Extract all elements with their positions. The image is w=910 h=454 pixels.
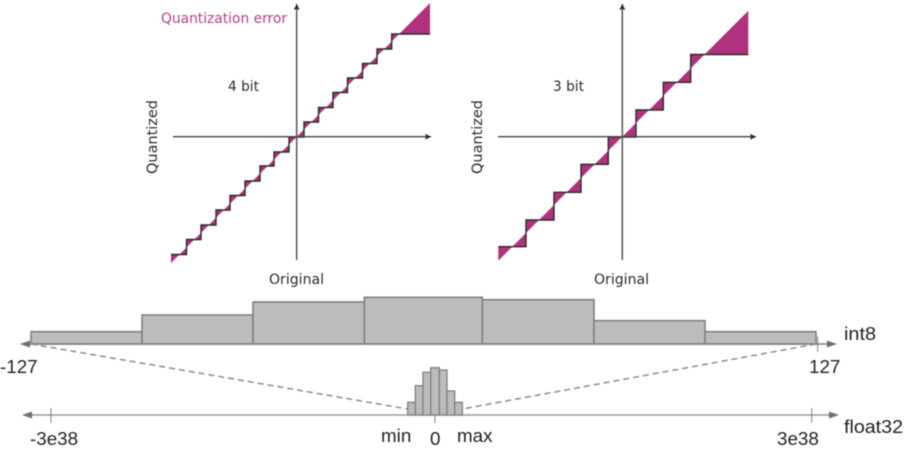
label: min: min [381,425,411,446]
label: max: max [457,425,493,446]
int8 histogram and axis [0,297,876,377]
axis: horizontal (3 bit) [498,136,756,138]
quantization error area (4 bit) [171,3,430,263]
label: quantized (3 bit): Quantized [470,100,486,174]
int8 axis [20,337,837,352]
label: float32: float32 [844,416,903,437]
dashed projection lines [31,344,816,409]
label: -3e38: -3e38 [30,428,78,449]
staircase (3 bit) [498,54,748,247]
chart: 4 bit quantization [145,3,431,288]
label: original (3 bit): Original [594,272,649,288]
label: 3e38: 3e38 [777,428,819,449]
label: 0: 0 [430,428,440,449]
label: quantization error: Quantization error [161,11,287,27]
int8 histogram bars [31,297,816,344]
axis: vertical (4 bit) [296,4,298,260]
axis: horizontal (4 bit) [173,136,431,138]
label: 4 bit: 4 bit [228,79,259,95]
label: original (4 bit): Original [269,272,324,288]
label: int8: int8 [844,323,876,344]
label: quantized (4 bit): Quantized [145,100,161,174]
label: -127: -127 [0,356,38,377]
label: 3 bit: 3 bit [553,79,584,95]
float32 histogram bars [408,368,462,415]
quantization error area (3 bit) [498,11,748,261]
float32 histogram and axis [22,368,903,449]
float32 axis [22,408,839,423]
chart: 3 bit quantization [470,4,756,288]
axis: vertical (3 bit) [621,4,623,260]
staircase (4 bit) [171,34,430,254]
label: 127: 127 [809,356,840,377]
